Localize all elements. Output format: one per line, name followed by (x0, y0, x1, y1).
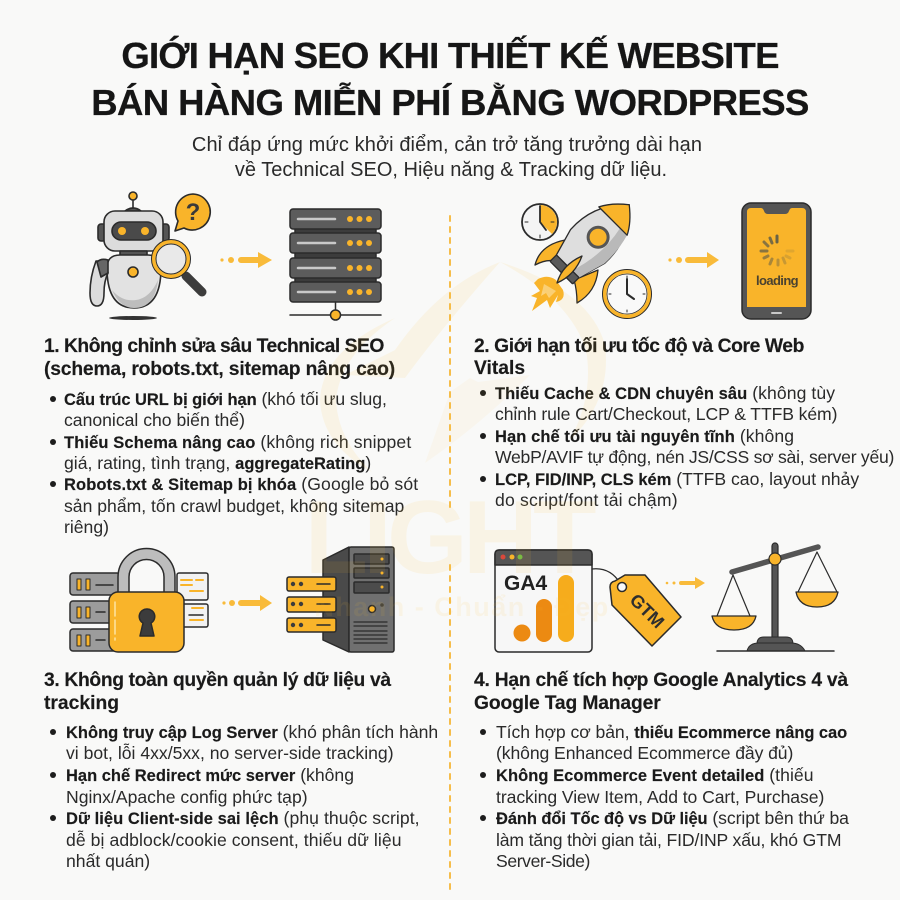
panel 4: GA4 and GTM: Tích hợp cơ bản, thiếu Ecommerce nâng cao (496, 722, 847, 742)
subtitle: Chỉ đáp ứng mức khởi điểm, cản trở tăng trưởng dài hạn (192, 134, 702, 156)
subtitle: về Technical SEO, Hiệu năng & Tracking dữ liệu. (235, 159, 667, 181)
watermark: Nhanh - Chuẩn - Đẹp (314, 592, 610, 622)
panel 2: core web vitals: do script/font tải chậm) (495, 490, 678, 510)
icon: GTM tag (592, 569, 681, 646)
panel 4: GA4 and GTM: Server-Side) (496, 851, 590, 871)
panel 3: data and tracking: Dữ liệu Client-side sai lệch (phụ thuộc script, (66, 808, 420, 828)
panel 4: GA4 and GTM: làm tăng thời gian tải, FID/INP xấu, khó GTM (496, 830, 841, 850)
watermark: LIGHT (305, 480, 596, 596)
title (91, 35, 809, 123)
panel 1: technical SEO: canonical cho biến thể) (64, 410, 245, 430)
panel 4: GA4 and GTM: 4. Hạn chế tích hợp Google Analytics 4 và (474, 670, 848, 691)
icon: padlock over servers (70, 548, 208, 652)
panel 3: data and tracking: Hạn chế Redirect mức server (không (66, 765, 354, 785)
icon: phone loading: loading (756, 273, 799, 288)
panel 1: technical SEO: riêng) (64, 517, 109, 537)
panel 3: data and tracking: vi bot, lỗi 4xx/5xx, no server-side tracking) (66, 743, 394, 763)
panel 2: core web vitals: LCP, FID/INP, CLS kém (TTFB cao, layout nhảy (495, 469, 859, 489)
arrow 3 (222, 595, 272, 611)
panel 3: data and tracking: tracking (44, 693, 119, 714)
panel 1: technical SEO (44, 336, 418, 537)
arrow 2 (668, 252, 719, 268)
panel 3: data and tracking: Không truy cập Log Server (khó phân tích hành (66, 722, 438, 742)
title: BÁN HÀNG MIỄN PHÍ BẰNG WORDPRESS (91, 82, 809, 123)
icon: robot with magnifying glass (90, 192, 210, 320)
icon: GA4 window (495, 550, 592, 652)
panel 1: technical SEO: Thiếu Schema nâng cao (không rich snippet (64, 432, 411, 452)
icon: balance scale (712, 543, 838, 651)
panel 3: data and tracking (44, 670, 438, 871)
panel 2: core web vitals (474, 336, 894, 510)
icon: GA4 window: GA4 (504, 572, 548, 595)
panel 4: GA4 and GTM: (không Enhanced Ecommerce đầy đủ) (496, 743, 793, 763)
panel 3: data and tracking: nhất quán) (66, 851, 150, 871)
panel 1: technical SEO: (schema, robots.txt, sitemap nâng cao) (44, 359, 395, 380)
panel 4: GA4 and GTM: Google Tag Manager (474, 693, 661, 714)
panel 4: GA4 and GTM: Đánh đổi Tốc độ vs Dữ liệu (script bên thứ ba (496, 808, 849, 828)
icon: GTM tag: GTM (626, 590, 668, 632)
title: GIỚI HẠN SEO KHI THIẾT KẾ WEBSITE (121, 35, 779, 76)
panel 2: core web vitals: 2. Giới hạn tối ưu tốc độ và Core Web (474, 336, 804, 357)
panel 3: data and tracking: 3. Không toàn quyền quản lý dữ liệu và (44, 670, 391, 691)
arrow 1 (220, 252, 272, 268)
subtitle (192, 134, 702, 181)
panel 2: core web vitals: chỉnh rule Cart/Checkout, LCP & TTFB kém) (495, 404, 837, 424)
icon: robot with magnifying glass: ? (186, 199, 200, 226)
panel 2: core web vitals: Hạn chế tối ưu tài nguyên tĩnh (không (495, 426, 794, 446)
icon: rocket with clocks (522, 188, 652, 318)
panel 1: technical SEO: Cấu trúc URL bị giới hạn (khó tối ưu slug, (64, 389, 387, 409)
panel 3: data and tracking: dễ bị adblock/cookie consent, thiếu dữ liệu (66, 830, 402, 850)
panel 4: GA4 and GTM (474, 670, 849, 871)
panel 1: technical SEO: Robots.txt & Sitemap bị khóa (Google bỏ sót (64, 474, 418, 494)
panel 2: core web vitals: Vitals (474, 358, 525, 379)
panel 2: core web vitals: WebP/AVIF tự động, nén JS/CSS sơ sài, server yếu) (495, 447, 894, 467)
panel 2: core web vitals: Thiếu Cache & CDN chuyên sâu (không tùy (495, 383, 835, 403)
panel 4: GA4 and GTM: Không Ecommerce Event detailed (thiếu (496, 765, 814, 785)
panel 1: technical SEO: giá, rating, tình trạng, aggregateRating) (64, 453, 371, 473)
panel 1: technical SEO: sản phẩm, tốn crawl budget, không sitemap (64, 496, 404, 516)
arrow 4 (666, 577, 705, 589)
panel 4: GA4 and GTM: tracking View Item, Add to Cart, Purchase) (496, 787, 824, 807)
panel 1: technical SEO: 1. Không chỉnh sửa sâu Technical SEO (44, 336, 384, 357)
panel 3: data and tracking: Nginx/Apache config phức tạp) (66, 787, 308, 807)
icon: server tower (287, 547, 394, 652)
icon: phone loading (742, 203, 811, 319)
icon: server rack (290, 209, 381, 320)
